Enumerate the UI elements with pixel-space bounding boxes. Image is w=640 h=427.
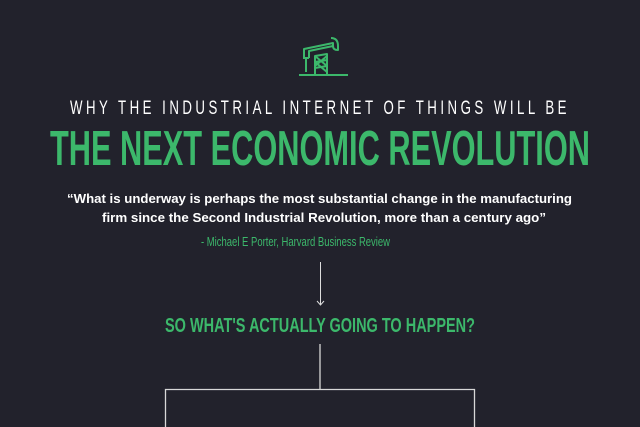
section heading: SO WHAT'S ACTUALLY GOING TO HAPPEN? xyxy=(165,315,475,337)
arrow down xyxy=(317,262,324,305)
quote: “What is underway is perhaps the most substantial change in the manufacturing xyxy=(67,191,572,206)
attribution: - Michael E Porter, Harvard Business Review xyxy=(201,234,390,249)
icon: oil pump jack xyxy=(299,38,348,75)
quote: firm since the Second Industrial Revolution, more than a century ago” xyxy=(102,210,546,225)
connector and box xyxy=(166,344,474,427)
quote xyxy=(67,191,572,225)
